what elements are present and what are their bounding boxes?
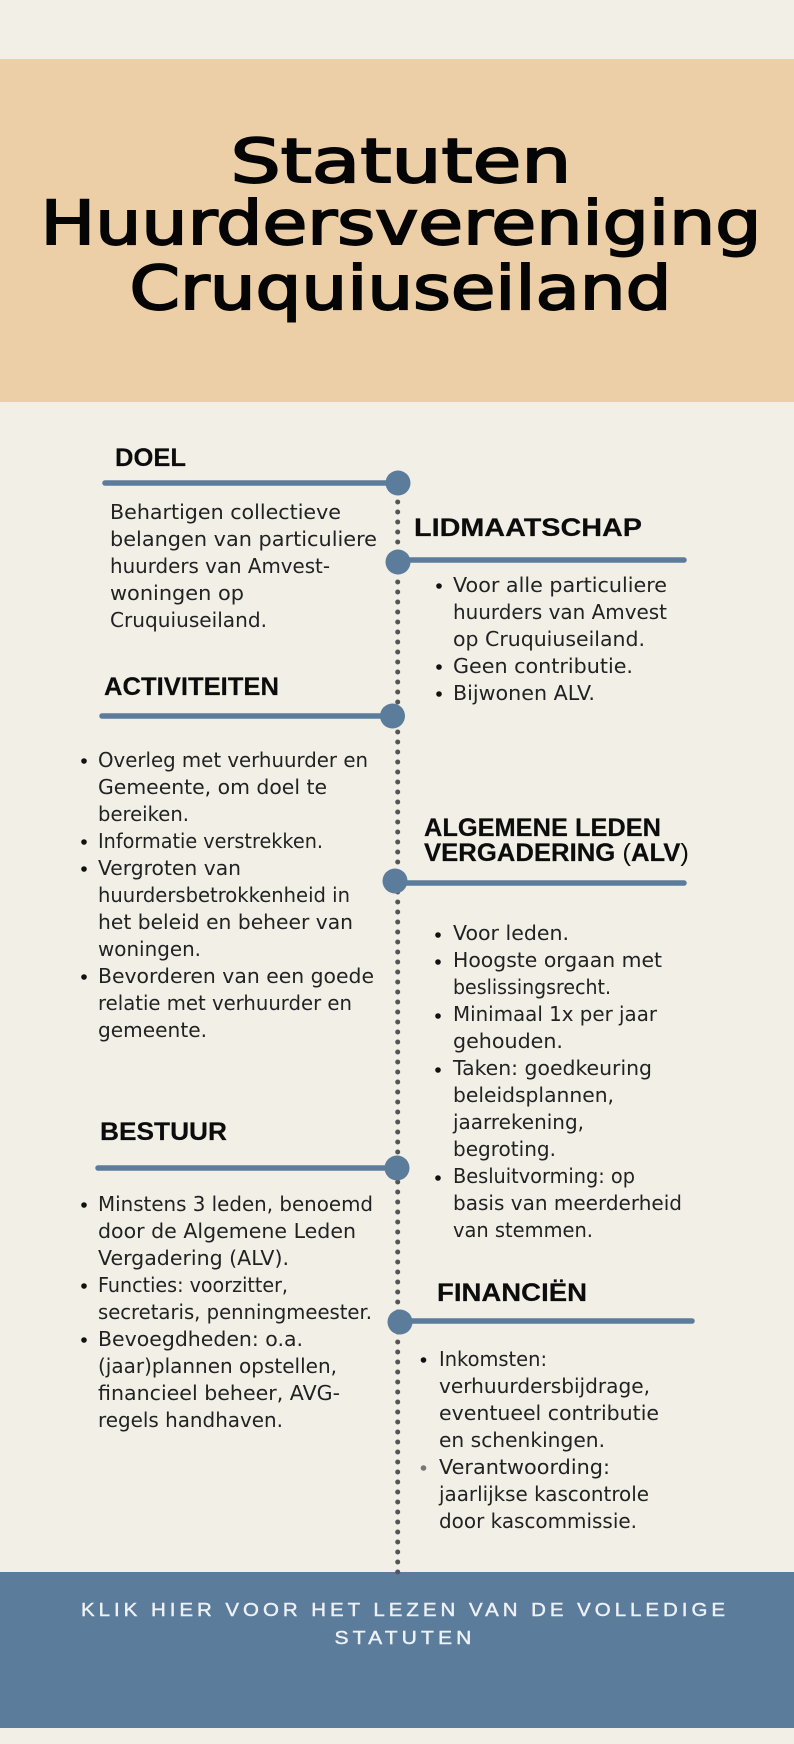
list: alv — [435, 921, 682, 1242]
list: bestuur: Vergadering (ALV). — [98, 1246, 289, 1270]
list: alv: Taken: goedkeuring — [452, 1056, 652, 1080]
list: alv: gehouden. — [453, 1029, 563, 1053]
list: activiteiten: relatie met verhuurder en — [98, 991, 352, 1015]
list: alv: beslissingsrecht. — [453, 975, 611, 999]
list: activiteiten: woningen. — [98, 937, 201, 961]
footer banner — [0, 1572, 794, 1728]
heading: algemene leden vergadering: VERGADERING (ALV) — [424, 839, 689, 867]
connector: alv — [382, 868, 684, 894]
text: doel: Behartigen collectieve — [110, 500, 341, 524]
list: bestuur: Minstens 3 leden, benoemd — [98, 1192, 373, 1216]
connector: doel — [105, 470, 410, 496]
text: doel: woningen op — [110, 581, 244, 605]
panel: lidmaatschap — [386, 514, 684, 705]
heading: algemene leden vergadering: ALGEMENE LEDEN — [424, 814, 661, 842]
list: alv: jaarrekening, — [452, 1110, 584, 1134]
heading: lidmaatschap: LIDMAATSCHAP — [414, 514, 642, 542]
list: financien — [421, 1347, 659, 1533]
connector: activiteiten — [102, 704, 405, 728]
list: financien: Inkomsten: — [439, 1347, 547, 1371]
heading: doel: DOEL — [115, 444, 186, 472]
list: financien: jaarlijkse kascontrole — [438, 1482, 649, 1506]
text: doel — [110, 500, 377, 632]
list: bestuur: regels handhaven. — [98, 1408, 283, 1432]
list: lidmaatschap: Voor alle particuliere — [453, 573, 667, 597]
list: activiteiten: Gemeente, om doel te — [98, 775, 327, 799]
list: lidmaatschap: huurders van Amvest — [453, 600, 667, 624]
list: bestuur: (jaar)plannen opstellen, — [98, 1354, 337, 1378]
footer link text: KLIK HIER VOOR HET LEZEN VAN DE VOLLEDIGE — [81, 1599, 729, 1620]
list: activiteiten: Overleg met verhuurder en — [98, 748, 368, 772]
list: lidmaatschap: Bijwonen ALV. — [453, 681, 595, 705]
list: alv: Voor leden. — [453, 921, 569, 945]
text: doel: huurders van Amvest- — [110, 554, 330, 578]
panel: activiteiten — [81, 673, 405, 1042]
list: activiteiten: gemeente. — [98, 1018, 207, 1042]
list: activiteiten: huurdersbetrokkenheid in — [98, 883, 350, 907]
dotted timeline — [395, 502, 400, 1573]
list: activiteiten: het beleid en beheer van — [98, 910, 353, 934]
heading: algemene leden vergadering — [424, 814, 689, 867]
footer link text — [81, 1599, 729, 1648]
list: alv: van stemmen. — [453, 1218, 593, 1242]
list: activiteiten: Bevorderen van een goede — [98, 964, 374, 988]
list: financien: en schenkingen. — [439, 1428, 605, 1452]
connector: financien — [388, 1310, 692, 1334]
list: activiteiten: Vergroten van — [98, 856, 241, 880]
list: activiteiten — [81, 748, 374, 1042]
list: financien: door kascommissie. — [439, 1509, 637, 1533]
heading: financien: FINANCIËN — [437, 1279, 587, 1307]
list: alv: begroting. — [453, 1137, 556, 1161]
list: bestuur — [81, 1192, 373, 1432]
list: lidmaatschap — [436, 573, 667, 705]
list: financien: Verantwoording: — [439, 1455, 610, 1479]
list: lidmaatschap: Geen contributie. — [453, 654, 633, 678]
list: activiteiten: bereiken. — [98, 802, 189, 826]
text: doel: belangen van particuliere — [110, 527, 377, 551]
connector: lidmaatschap — [386, 550, 684, 574]
title banner — [0, 59, 794, 402]
list: alv: beleidsplannen, — [453, 1083, 614, 1107]
text: doel: Cruquiuseiland. — [110, 608, 267, 632]
list: bestuur: Bevoegdheden: o.a. — [98, 1327, 303, 1351]
list: bestuur: financieel beheer, AVG- — [98, 1381, 340, 1405]
list: alv: Hoogste orgaan met — [453, 948, 662, 972]
list: activiteiten: Informatie verstrekken. — [98, 829, 323, 853]
heading: activiteiten: ACTIVITEITEN — [104, 673, 279, 701]
list: alv: basis van meerderheid — [453, 1191, 682, 1215]
footer link text: STATUTEN — [334, 1627, 476, 1648]
title: Cruquiuseiland — [130, 254, 672, 324]
list: lidmaatschap: op Cruquiuseiland. — [453, 627, 645, 651]
panel: bestuur — [81, 1118, 409, 1432]
panel: doel — [105, 444, 410, 632]
list: financien: verhuurdersbijdrage, — [439, 1374, 650, 1398]
list: financien: eventueel contributie — [439, 1401, 659, 1425]
title: Huurdersvereniging — [40, 189, 762, 259]
panel: algemene leden vergadering — [382, 814, 689, 1242]
list: alv: Besluitvorming: op — [453, 1164, 635, 1188]
heading: bestuur: BESTUUR — [100, 1118, 227, 1146]
title: Statuten — [230, 127, 572, 197]
title — [40, 127, 762, 324]
list: bestuur: door de Algemene Leden — [98, 1219, 356, 1243]
list: bestuur: Functies: voorzitter, — [98, 1273, 288, 1297]
list: bestuur: secretaris, penningmeester. — [98, 1300, 372, 1324]
list: alv: Minimaal 1x per jaar — [453, 1002, 658, 1026]
connector: bestuur — [98, 1156, 410, 1180]
panel: financien — [388, 1279, 692, 1533]
